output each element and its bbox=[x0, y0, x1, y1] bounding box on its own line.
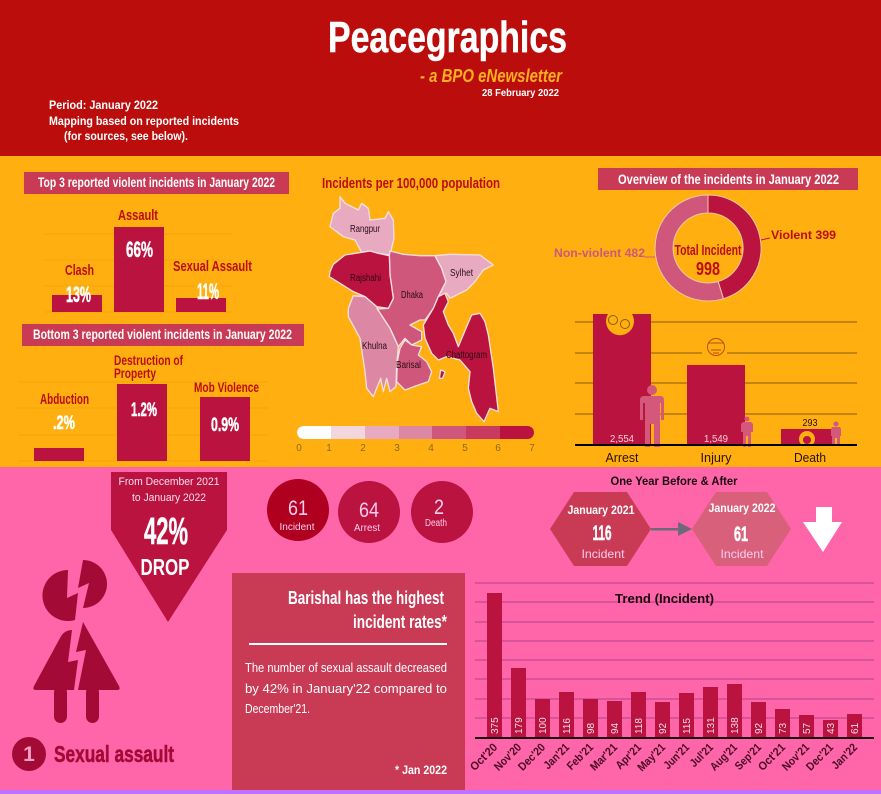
panel heading bbox=[288, 588, 447, 632]
heading: overview bbox=[598, 168, 858, 190]
hexagon: January 2022: 61 bbox=[734, 523, 748, 546]
bar: assault: 66% bbox=[126, 237, 153, 262]
month labels: Nov'20 bbox=[492, 742, 524, 773]
panel: overview bbox=[554, 168, 858, 465]
bar: destruction of property bbox=[114, 352, 183, 461]
bar: destruction of property: 1.2% bbox=[131, 400, 157, 421]
arrow: before to after bbox=[651, 522, 692, 536]
bars bbox=[487, 593, 862, 738]
donut centre label: 998 bbox=[696, 259, 720, 279]
panel body text: by 42% in January'22 compared to bbox=[245, 681, 447, 696]
map labels: Sylhet bbox=[450, 268, 473, 279]
bar: arrest bbox=[593, 314, 651, 465]
month labels: Sep'21 bbox=[733, 741, 764, 773]
bar: death: Death bbox=[794, 450, 826, 465]
bar: mob violence: Mob Violence bbox=[194, 379, 259, 395]
hexagon: January 2022: January 2022 bbox=[708, 501, 776, 515]
bar: clash bbox=[52, 262, 102, 312]
bar values: 57 bbox=[802, 722, 813, 734]
bar values: 98 bbox=[586, 722, 597, 734]
bar: injury bbox=[687, 338, 745, 465]
bar: clash: 13% bbox=[66, 282, 91, 307]
month labels: Dec'20 bbox=[516, 742, 548, 773]
map legend bbox=[296, 426, 535, 454]
bar: abduction: .2% bbox=[53, 413, 75, 434]
label: sexual assault: Sexual assault bbox=[54, 741, 174, 767]
month labels: Mar'21 bbox=[588, 741, 621, 773]
bar values: 116 bbox=[562, 718, 573, 734]
panel: one year before and after bbox=[550, 474, 842, 566]
bar values: 138 bbox=[730, 717, 741, 734]
map legend: 0 bbox=[296, 443, 302, 454]
baseline bbox=[575, 444, 857, 446]
map legend: 1 bbox=[326, 443, 332, 454]
choropleth map bbox=[329, 197, 498, 422]
month labels: Jun'21 bbox=[662, 741, 692, 772]
heading: top 3: Top 3 reported violent incidents in January 2022 bbox=[38, 174, 275, 190]
callout: 42% drop: From December 2021 bbox=[118, 476, 220, 488]
bar values: 73 bbox=[778, 722, 789, 734]
map labels: Rajshahi bbox=[350, 273, 381, 284]
bar values: 92 bbox=[754, 722, 765, 734]
bar: arrest: Arrest bbox=[606, 450, 639, 465]
bar: clash: Clash bbox=[65, 262, 94, 279]
stat circles bbox=[267, 479, 473, 543]
bar: assault bbox=[114, 207, 164, 312]
month labels: Aug'21 bbox=[708, 741, 740, 773]
stat: arrest: Arrest bbox=[354, 523, 380, 534]
bar values: 100 bbox=[538, 717, 549, 734]
period note: Mapping based on reported incidents bbox=[49, 116, 239, 128]
bar: destruction of property: Destruction of bbox=[114, 352, 183, 368]
month labels: Apr'21 bbox=[614, 741, 644, 772]
map legend: 7 bbox=[529, 443, 535, 454]
map labels: Chattogram bbox=[446, 350, 487, 361]
donut label: non-violent: Non-violent 482 bbox=[554, 246, 645, 260]
icon: small person bbox=[831, 422, 841, 445]
callout: 42% drop: DROP bbox=[140, 554, 190, 580]
month labels: Nov'21 bbox=[780, 741, 812, 773]
panel: Barishal text bbox=[232, 573, 465, 790]
bar values: 179 bbox=[514, 717, 525, 734]
icon: handcuffs bbox=[606, 314, 634, 335]
period note: (for sources, see below). bbox=[64, 131, 188, 143]
bar: mob violence: 0.9% bbox=[211, 415, 239, 436]
month labels: May'21 bbox=[636, 741, 668, 774]
callout: 42% drop bbox=[111, 472, 227, 622]
month labels bbox=[468, 741, 860, 774]
label: sexual assault bbox=[12, 737, 174, 771]
bar values: 375 bbox=[490, 717, 501, 734]
icon: white down arrow bbox=[803, 507, 842, 552]
month labels: Jul'21 bbox=[688, 741, 716, 770]
bar values: 115 bbox=[682, 718, 693, 734]
bar: sexual assault bbox=[173, 258, 252, 312]
bar: death: 293 bbox=[802, 418, 818, 429]
hexagon: January 2021: Incident bbox=[582, 547, 625, 561]
map legend: 2 bbox=[360, 443, 366, 454]
bar: sexual assault: Sexual Assault bbox=[173, 258, 252, 275]
map labels: Dhaka bbox=[401, 290, 423, 301]
icon: injured face bbox=[708, 338, 724, 356]
bar: injury: 1,549 bbox=[704, 434, 728, 445]
heading: top 3 bbox=[24, 172, 289, 194]
bar values: 43 bbox=[826, 722, 837, 734]
period note bbox=[49, 100, 239, 143]
panel heading: Barishal has the highest bbox=[288, 588, 444, 608]
bar: assault: Assault bbox=[118, 207, 158, 224]
map legend: 4 bbox=[428, 443, 434, 454]
month labels: Oct'20 bbox=[468, 742, 500, 773]
map labels: Khulna bbox=[362, 341, 387, 352]
callout: 42% drop: to January 2022 bbox=[132, 492, 206, 504]
panel heading: incident rates* bbox=[353, 612, 447, 632]
map labels bbox=[350, 224, 487, 371]
bar: destruction of property: Property bbox=[114, 365, 156, 381]
subtitle: - a BPO eNewsletter bbox=[420, 66, 563, 86]
map labels: Rangpur bbox=[350, 224, 381, 235]
hexagon: January 2022: Incident bbox=[720, 547, 764, 561]
stat: incident bbox=[267, 479, 329, 541]
bar: mob violence bbox=[194, 379, 259, 461]
heading: one year: One Year Before & After bbox=[610, 474, 738, 488]
map legend: 3 bbox=[394, 443, 400, 454]
bar values: 61 bbox=[850, 722, 861, 734]
bar: abduction bbox=[34, 391, 89, 461]
donut chart bbox=[655, 195, 761, 301]
stat: incident: 61 bbox=[288, 497, 308, 520]
stat: death: Death bbox=[425, 518, 447, 529]
map labels: Barisal bbox=[396, 360, 421, 371]
icon: medium person bbox=[741, 416, 753, 447]
heading: bottom 3: Bottom 3 reported violent incidents in January 2022 bbox=[33, 326, 292, 342]
stat: arrest bbox=[338, 481, 400, 543]
title: Peacegraphics bbox=[328, 13, 567, 62]
donut centre label: Total Incident bbox=[674, 242, 742, 259]
stat: arrest: 64 bbox=[359, 499, 379, 522]
panel body text: The number of sexual assault decreased bbox=[245, 660, 447, 675]
bar: abduction: Abduction bbox=[40, 391, 89, 408]
bar: death bbox=[781, 418, 833, 465]
hexagon: January 2021: January 2021 bbox=[568, 503, 635, 517]
panel: bottom 3 incidents bbox=[18, 324, 304, 461]
icon: large person bbox=[640, 385, 664, 447]
panel body text: December'21. bbox=[245, 701, 310, 716]
bar values: 131 bbox=[706, 717, 717, 734]
month labels: Oct'21 bbox=[756, 741, 789, 773]
bar values: 92 bbox=[658, 722, 669, 734]
label: sexual assault: 1 bbox=[23, 743, 35, 766]
bar: sexual assault: 11% bbox=[197, 279, 219, 304]
bar values: 94 bbox=[610, 722, 621, 734]
stat: incident: Incident bbox=[280, 522, 315, 533]
header bbox=[49, 13, 567, 143]
callout: 42% drop: 42% bbox=[144, 511, 188, 553]
date: 28 February 2022 bbox=[482, 88, 559, 99]
period note: Period: January 2022 bbox=[49, 100, 158, 112]
panel footnote: * Jan 2022 bbox=[395, 763, 447, 777]
hexagon: January 2022 bbox=[692, 492, 791, 566]
icon: broken female figure bbox=[33, 560, 120, 723]
trend chart bbox=[468, 583, 874, 774]
month labels: Jan'21 bbox=[542, 741, 572, 772]
heading: bottom 3 bbox=[22, 324, 304, 346]
map legend: 6 bbox=[495, 443, 501, 454]
panel: top 3 incidents bbox=[24, 172, 289, 312]
hexagon: January 2021 bbox=[550, 492, 651, 566]
bar values: 118 bbox=[634, 718, 645, 734]
stat: death bbox=[411, 481, 473, 543]
month labels: Jan'22 bbox=[830, 742, 860, 772]
hexagon: January 2021: 116 bbox=[592, 522, 612, 545]
chart title: Trend (Incident) bbox=[615, 591, 714, 606]
stat: death: 2 bbox=[434, 496, 444, 519]
month labels: Feb'21 bbox=[565, 741, 596, 773]
map legend: 5 bbox=[462, 443, 468, 454]
panel body text bbox=[245, 660, 447, 716]
bar: injury: Injury bbox=[700, 450, 732, 465]
donut centre label bbox=[674, 242, 742, 279]
panel: map bbox=[296, 175, 535, 454]
bar values bbox=[490, 717, 861, 734]
map heading: Incidents per 100,000 population bbox=[322, 175, 500, 192]
month labels: Dec'21 bbox=[804, 741, 837, 773]
donut label: violent: Violent 399 bbox=[771, 228, 836, 242]
bar: arrest: 2,554 bbox=[610, 434, 634, 445]
